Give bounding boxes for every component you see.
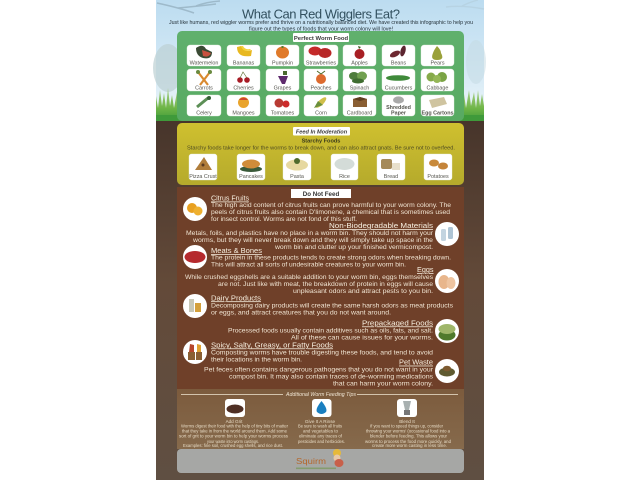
icon: grit	[225, 399, 245, 417]
card: pasta	[283, 154, 311, 180]
item: dairy products: Dairy Products	[211, 293, 261, 302]
card: watermelon: Watermelon	[190, 60, 218, 66]
tip: add grit: Add Grit	[226, 419, 243, 424]
item: dairy products: or eggs, and attract creatures that you do not want around.	[211, 310, 391, 317]
tip: blend it: throwing your worms' (occasional food into a	[366, 428, 450, 434]
item: meats and bones: Meats & Bones	[211, 246, 262, 255]
item: dairy products: Decomposing dairy products will create the same harsh odors as meat products	[211, 303, 454, 310]
panel: logo footer	[177, 449, 464, 473]
card: peaches	[304, 69, 338, 92]
card: strawberries	[304, 45, 338, 66]
tip: blend it	[365, 399, 451, 448]
tip: give it a rinse: eliminate any traces of	[299, 434, 343, 439]
panel: do not feed	[177, 187, 464, 389]
icon: eggs	[435, 269, 459, 293]
icon: blender	[397, 399, 417, 417]
tip: blend it: create more worm casting in less time.	[372, 443, 447, 448]
card: bread: Bread	[384, 174, 398, 180]
card: cardboard: Cardboard	[347, 110, 372, 116]
card: pancakes	[237, 154, 265, 180]
icon: can	[435, 319, 459, 343]
item: spicy, salty, greasy or fatty foods: Composting worms have trouble digesting these foods, and tend to avoid	[211, 350, 433, 357]
card: cabbage: Cabbage	[427, 86, 448, 92]
card: watermelon	[187, 45, 221, 66]
item: non-biodegradable materials: Non-Biodegradable Materials	[329, 221, 433, 230]
item: citrus fruits: for insect control. Worms are not fond of this stuff.	[211, 216, 357, 223]
item: non-biodegradable materials	[186, 221, 459, 251]
tip: add grit: Examples: fine soil, crushed egg shells, and rice dust.	[183, 443, 283, 448]
tip: blend it: worms to process the food more quickly, and	[365, 439, 451, 444]
icon: fries	[183, 340, 207, 364]
card: beans	[382, 45, 415, 66]
item: citrus fruits: Citrus Fruits	[211, 194, 249, 202]
item: pet waste: Pet feces often contains dangerous pathogens that you do not want in your	[204, 367, 434, 374]
tree branches and foliage	[153, 0, 486, 92]
moderation description: Starchy foods take longer for the worms to break down, and can also attract gnats. Be sure not to overfeed.	[187, 145, 455, 151]
icon: dairy	[183, 294, 207, 318]
item: pet waste	[204, 358, 459, 388]
icon: bottles	[435, 222, 459, 246]
item: spicy, salty, greasy or fatty foods: their locations in the worm bin.	[211, 357, 302, 364]
tip: blend it: Blend It	[399, 419, 416, 424]
card: potatoes: Potatoes	[427, 174, 449, 180]
card: spinach: Spinach	[350, 86, 369, 92]
card: pasta: Pasta	[290, 174, 304, 180]
card: cucumber: Cucumbers	[385, 86, 413, 92]
tip: give it a rinse: Give It A Rinse	[305, 419, 336, 424]
card: potatoes	[424, 154, 452, 180]
background: sky	[156, 0, 484, 122]
heading: do not feed: Do Not Feed	[303, 191, 339, 198]
item: spicy, salty, greasy or fatty foods: Spicy, Salty, Greasy, or Fatty Foods	[211, 340, 333, 349]
card: bananas: Bananas	[233, 60, 254, 66]
item: prepackaged foods	[228, 318, 459, 343]
card: cardboard	[343, 95, 376, 116]
tip: add grit: sort of grit to your worm bin to help your worms process	[179, 434, 289, 439]
card: rice	[331, 154, 358, 180]
icon: meat	[183, 245, 207, 269]
tip: blend it: blender before feeding. This allows your	[370, 434, 447, 439]
card: tomatoes: Tomatoes	[271, 110, 294, 116]
card: tomatoes	[266, 95, 299, 116]
grass right	[460, 90, 484, 121]
card: carrots	[187, 69, 221, 92]
item: prepackaged foods: All of these can cause issues for your worms.	[291, 335, 433, 342]
card: bananas	[227, 45, 260, 66]
card: pizza crust: Pizza Crust	[189, 174, 217, 180]
tip: give it a rinse	[298, 399, 345, 444]
card: beans: Beans	[391, 60, 406, 66]
intro text: figure out the types of foods that your worm colony will love!	[249, 26, 393, 32]
card: grapes: Grapes	[274, 86, 292, 92]
panel: perfect worm food	[177, 31, 464, 121]
card: cherries	[227, 69, 260, 92]
card: rice: Rice	[339, 174, 350, 180]
card: peaches: Peaches	[311, 86, 332, 92]
card: celery: Celery	[196, 110, 212, 116]
card: shredded paper: Shredded	[386, 105, 411, 111]
tip: add grit: Worms digest their food with the help of tiny bits of matter	[181, 424, 288, 428]
card: egg cartons	[421, 95, 454, 116]
card: grapes	[266, 69, 299, 92]
item: spicy, salty, greasy or fatty foods	[183, 340, 433, 364]
card: shredded paper: Paper	[391, 110, 407, 116]
item: non-biodegradable materials: Metals, foils, and plastics have no place in a worm bin. They should not harm your	[186, 230, 434, 237]
item: eggs: While crushed eggshells are a suitable addition to your worm bin, eggs themselves	[185, 274, 434, 281]
heading: feed in moderation	[293, 127, 350, 136]
card: bread	[377, 154, 405, 180]
card: pumpkin	[266, 45, 299, 66]
tip: add grit	[179, 399, 289, 448]
heading: feed in moderation: Feed In Moderation	[296, 130, 348, 136]
card: celery	[187, 95, 221, 116]
card: mangoes	[227, 95, 260, 116]
card: cherries: Cherries	[233, 86, 254, 92]
item: meats and bones: The protein in these products tends to create strong odors when breaking down.	[211, 255, 451, 262]
icon: water drop	[312, 399, 332, 417]
panel: feed in moderation	[177, 123, 464, 185]
tip: add grit: your waste into worm castings.	[207, 439, 259, 444]
card: apples	[343, 45, 376, 66]
background: soil	[156, 121, 484, 480]
tip: give it a rinse: Be sure to wash all fruits	[298, 424, 343, 428]
item: meats and bones	[183, 245, 451, 269]
panel: additional worm feeding tips	[177, 389, 464, 449]
item: non-biodegradable materials: worms, but they will never break down and they will simply take up space in the	[192, 237, 433, 244]
card: spinach	[343, 69, 376, 92]
grass strip	[156, 115, 484, 121]
tip: blend it: If you want to speed things up, consider	[370, 424, 443, 428]
card: corn	[304, 95, 338, 116]
icon: citrus	[183, 197, 207, 221]
card: pears: Pears	[430, 60, 445, 66]
item: eggs	[185, 265, 459, 295]
card: carrots: Carrots	[195, 86, 213, 92]
heading: additional tips: Additional Worm Feeding Tips	[285, 392, 357, 398]
item: pet waste: that can harm your worm colony.	[333, 381, 433, 388]
card: pears	[421, 45, 454, 66]
card: mangoes: Mangoes	[232, 110, 255, 116]
card: cabbage	[421, 69, 454, 92]
card: shredded paper	[382, 95, 415, 116]
item: non-biodegradable materials: worm bin and clutter up your finished vermicompost.	[274, 244, 433, 251]
item: eggs: are not. Just like with meat, the breakdown of protein in eggs will cause	[218, 281, 433, 288]
item: citrus fruits	[183, 194, 451, 223]
tip: add grit: that they take in from the world around them. Add some	[182, 428, 287, 434]
heading: perfect worm food	[293, 33, 349, 42]
item: prepackaged foods: Prepackaged Foods	[362, 318, 433, 327]
subheading: starchy foods: Starchy Foods	[302, 138, 340, 144]
logo text: Squirm	[296, 456, 326, 466]
heading: perfect worm food: Perfect Worm Food	[294, 36, 349, 42]
card: corn: Corn	[315, 110, 327, 116]
item: eggs: unpleasant odors and attract pests to you bin.	[293, 288, 433, 295]
card: egg cartons: Egg Cartons	[421, 110, 454, 116]
item: citrus fruits: peels of citrus fruits also contain D'limonene, a chemical that is sometimes used	[211, 209, 450, 216]
item: pet waste: compost bin. It may also contain traces of de-worming medications	[229, 374, 434, 381]
card: apples: Apples	[351, 60, 368, 66]
icon: pet waste	[435, 359, 459, 383]
item: prepackaged foods: Processed foods usually contain additives such as oils, fats, and salt.	[228, 327, 433, 334]
card: pumpkin: Pumpkin	[272, 60, 293, 66]
grass left	[156, 88, 180, 121]
intro text	[169, 20, 473, 32]
card: pancakes: Pancakes	[239, 174, 263, 180]
card: cucumber	[382, 69, 415, 92]
tip: give it a rinse: and vegetables to	[303, 428, 338, 434]
title: What Can Red Wigglers Eat?	[242, 6, 400, 22]
icon: logo mascot	[333, 449, 344, 467]
item: eggs: Eggs	[417, 265, 434, 274]
item: pet waste: Pet Waste	[399, 358, 433, 367]
card: strawberries: Strawberries	[306, 60, 336, 66]
tip: give it a rinse: pesticides and herbicides.	[298, 439, 345, 444]
heading: do not feed	[291, 189, 351, 198]
item: citrus fruits: The high acid content of citrus fruits can prove harmful to your worm colony. The	[211, 202, 451, 209]
item: meats and bones: This will attract all sorts of undesirable creatures to your worm bin.	[211, 262, 406, 269]
card: pizza crust	[189, 154, 217, 180]
item: dairy products	[183, 293, 454, 318]
intro text: Just like humans, red wiggler worms prefer and thrive on a nutritionally balanced diet. We have created this infographic to help you	[169, 20, 473, 26]
